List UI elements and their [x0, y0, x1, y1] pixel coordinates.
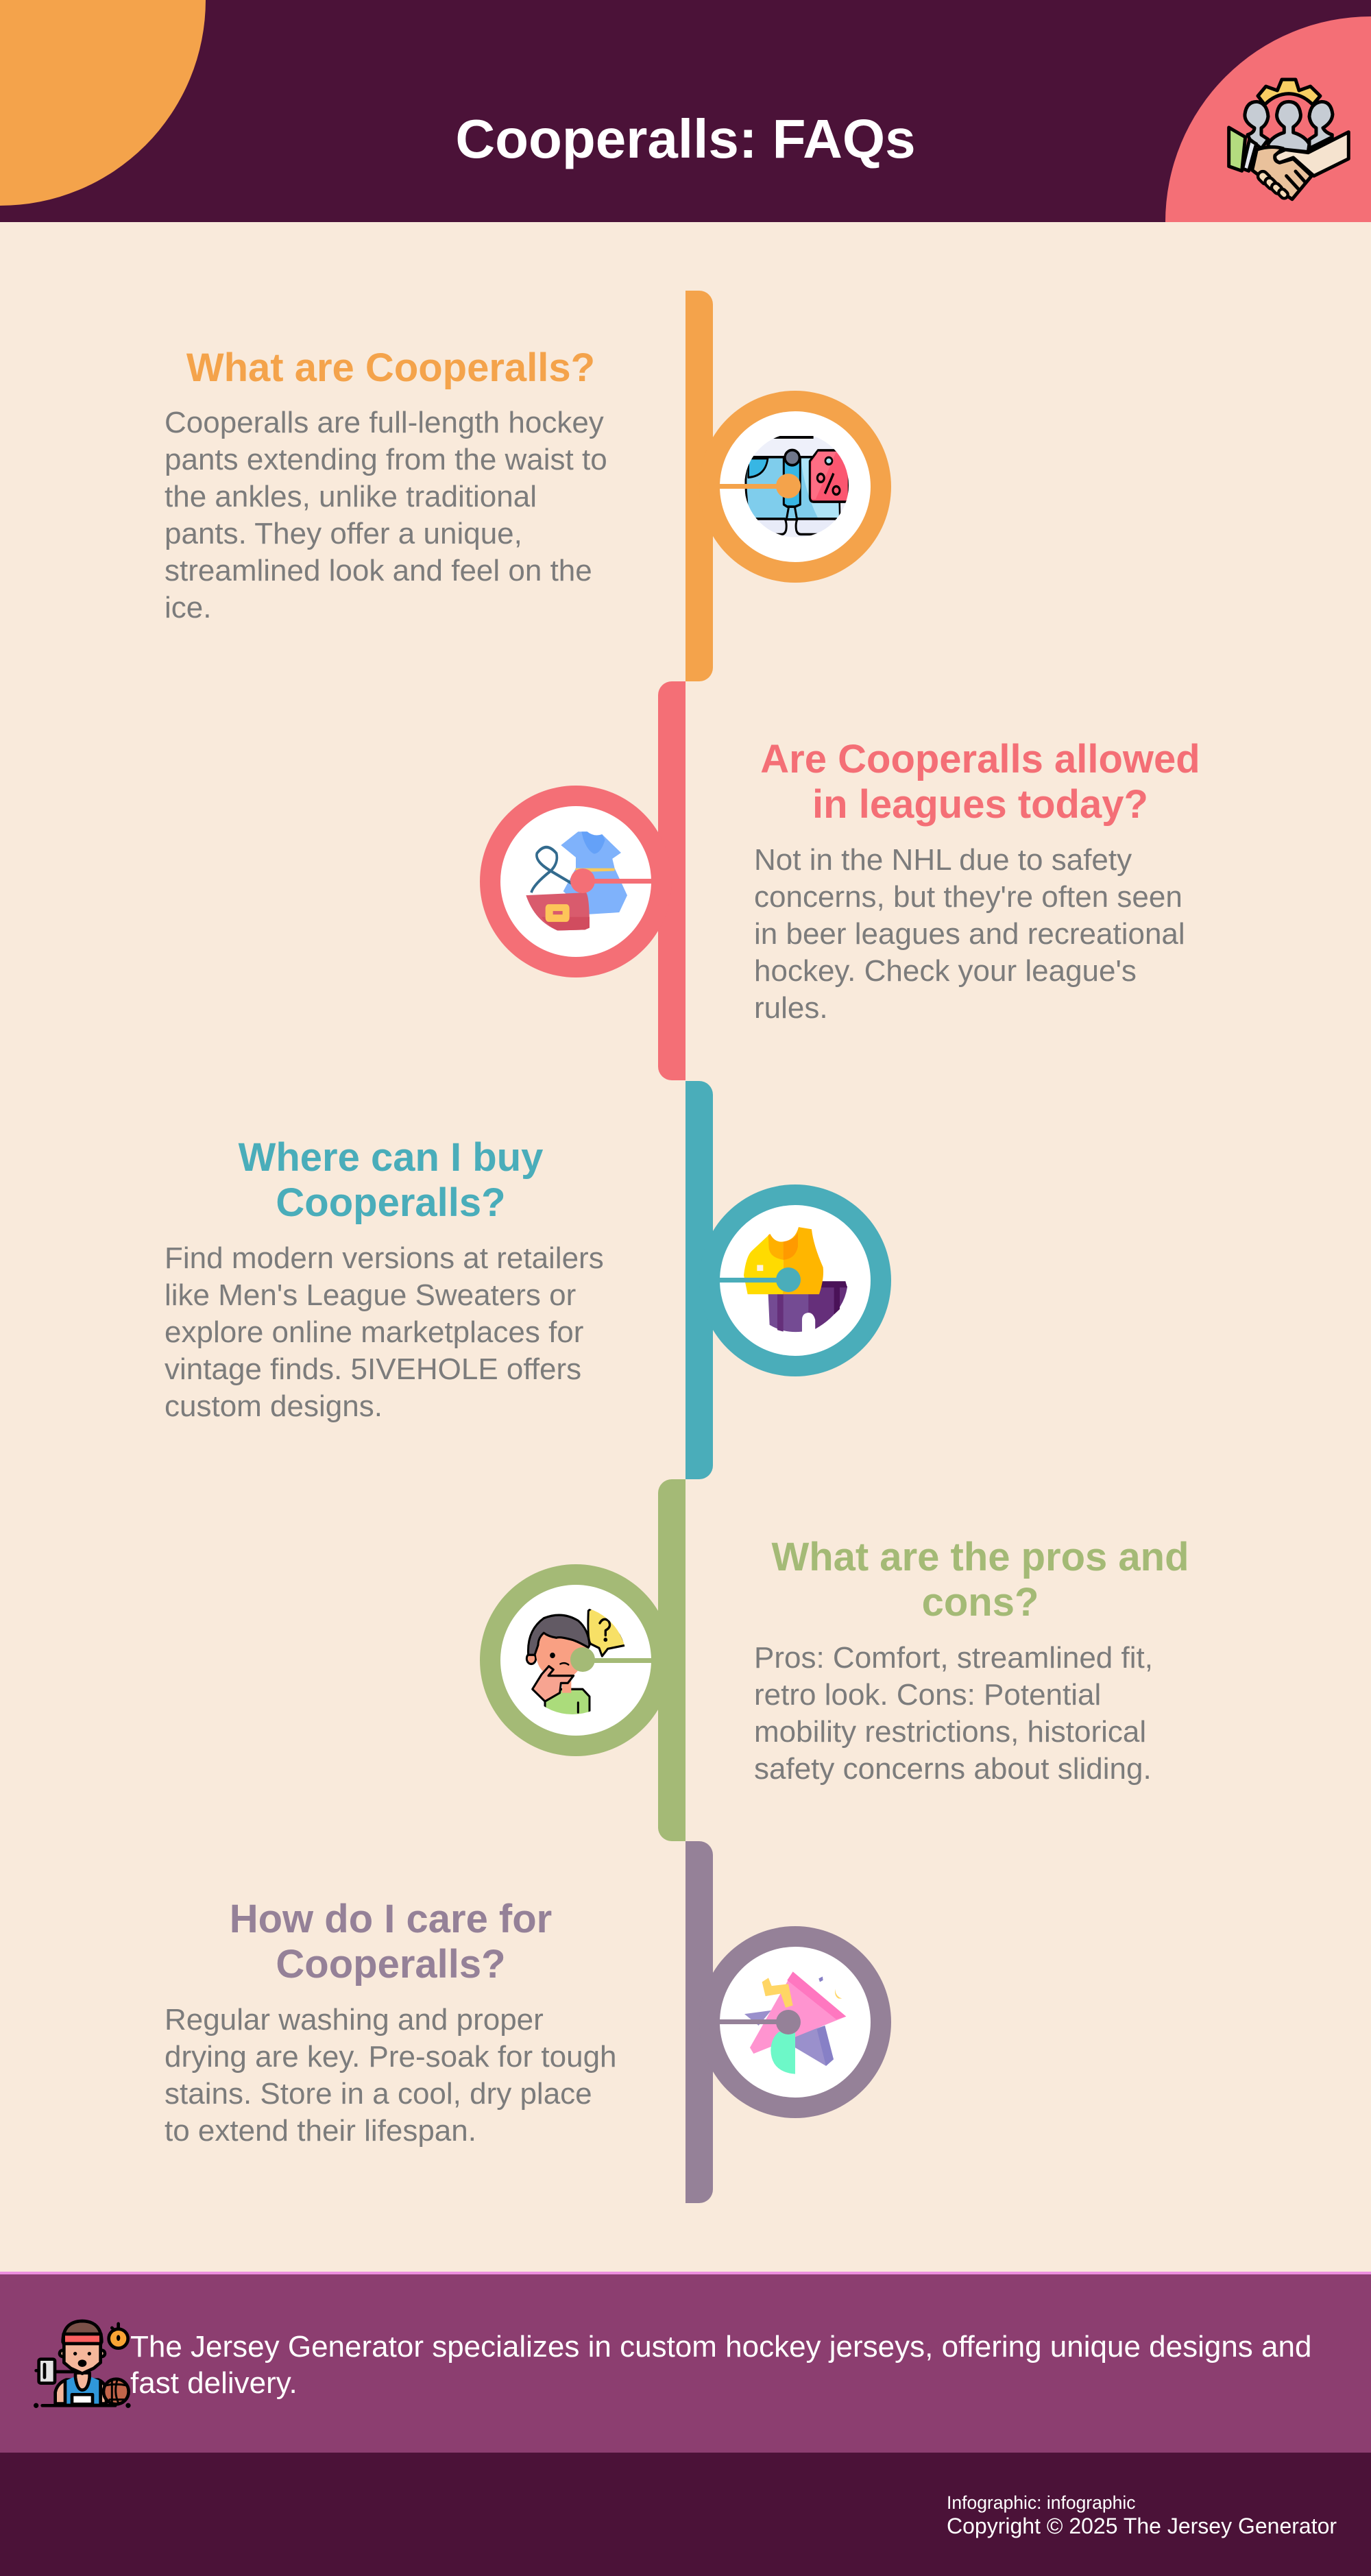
body text: like Men's League Sweaters or — [165, 1278, 576, 1312]
icon: abstract clothing shapes — [744, 1971, 846, 2074]
icon ring orange — [699, 391, 891, 583]
body text: the ankles, unlike traditional — [165, 480, 537, 513]
body text: Pros: Comfort, streamlined fit, — [754, 1641, 1153, 1675]
heading: Cooperalls? — [276, 1942, 506, 1986]
credits: Copyright © 2025 The Jersey Generator — [947, 2514, 1337, 2538]
body text: concerns, but they're often seen — [754, 880, 1182, 914]
panel: allowed in leagues — [480, 681, 1200, 1080]
icon: jersey and shorts — [744, 1227, 847, 1332]
body text: explore online marketplaces for — [165, 1315, 583, 1349]
body text: drying are key. Pre-soak for tough — [165, 2040, 617, 2074]
heading: cons? — [922, 1580, 1039, 1625]
body text: Find modern versions at retailers — [165, 1241, 604, 1275]
heading: Are Cooperalls allowed — [760, 737, 1200, 781]
credits: Infographic: infographic — [947, 2492, 1135, 2513]
body text: to extend their lifespan. — [165, 2114, 476, 2148]
icon: dress and handbag — [526, 831, 627, 931]
icon ring red — [480, 786, 672, 977]
timeline bar teal — [686, 1081, 713, 1479]
panel: pros and cons — [480, 1479, 1189, 1841]
connector line and dot — [570, 868, 651, 893]
panel: what are cooperalls — [165, 291, 891, 681]
timeline bar green — [658, 1479, 686, 1841]
body text: pants extending from the waist to — [165, 443, 607, 476]
body text: safety concerns about sliding. — [754, 1752, 1152, 1786]
icon: thinking person — [526, 1606, 626, 1716]
decorative orange quarter circle — [0, 0, 206, 206]
body text: custom designs. — [165, 1389, 383, 1423]
body text: Not in the NHL due to safety — [754, 843, 1132, 877]
icon ring purple — [699, 1926, 891, 2118]
body text: vintage finds. 5IVEHOLE offers — [165, 1352, 581, 1386]
body text: ice. — [165, 591, 211, 624]
body text: retro look. Cons: Potential — [754, 1678, 1101, 1712]
heading: Cooperalls? — [276, 1180, 506, 1225]
connector line and dot — [720, 2010, 801, 2034]
connector line and dot — [570, 1647, 651, 1672]
body text: mobility restrictions, historical — [754, 1715, 1146, 1749]
heading: What are Cooperalls? — [186, 345, 595, 390]
footer blurb: The Jersey Generator specializes in custom hockey jerseys, offering unique designs and — [130, 2330, 1311, 2364]
icon: athlete — [35, 2321, 129, 2407]
icon ring green — [480, 1564, 672, 1756]
title: Cooperalls: FAQs — [455, 108, 916, 169]
footer blurb: fast delivery. — [130, 2366, 298, 2400]
heading: What are the pros and — [771, 1535, 1189, 1579]
panel: care — [165, 1841, 891, 2203]
body text: rules. — [754, 991, 828, 1025]
header band — [0, 0, 1371, 222]
body text: Regular washing and proper — [165, 2003, 544, 2037]
connector line and dot — [720, 1267, 801, 1292]
connector line and dot — [720, 474, 801, 498]
decorative pink quarter circle — [1165, 16, 1371, 222]
timeline bar purple — [686, 1841, 713, 2203]
icon: shorts with price tag — [745, 437, 849, 537]
panel: where to buy — [165, 1081, 891, 1479]
body text: stains. Store in a cool, dry place — [165, 2077, 592, 2111]
icon ring teal — [699, 1184, 891, 1376]
icon: teamwork handshake — [1229, 80, 1348, 200]
heading: How do I care for — [230, 1897, 552, 1941]
body text: pants. They offer a unique, — [165, 517, 522, 550]
timeline bar red — [658, 681, 686, 1080]
copyright band — [0, 2453, 1371, 2576]
heading: in leagues today? — [812, 782, 1148, 827]
body text: in beer leagues and recreational — [754, 917, 1185, 951]
body text: streamlined look and feel on the — [165, 554, 592, 587]
body text: Cooperalls are full-length hockey — [165, 406, 604, 439]
heading: Where can I buy — [239, 1135, 543, 1180]
timeline bar orange — [686, 291, 713, 681]
body text: hockey. Check your league's — [754, 954, 1137, 988]
footer band — [0, 2272, 1371, 2453]
